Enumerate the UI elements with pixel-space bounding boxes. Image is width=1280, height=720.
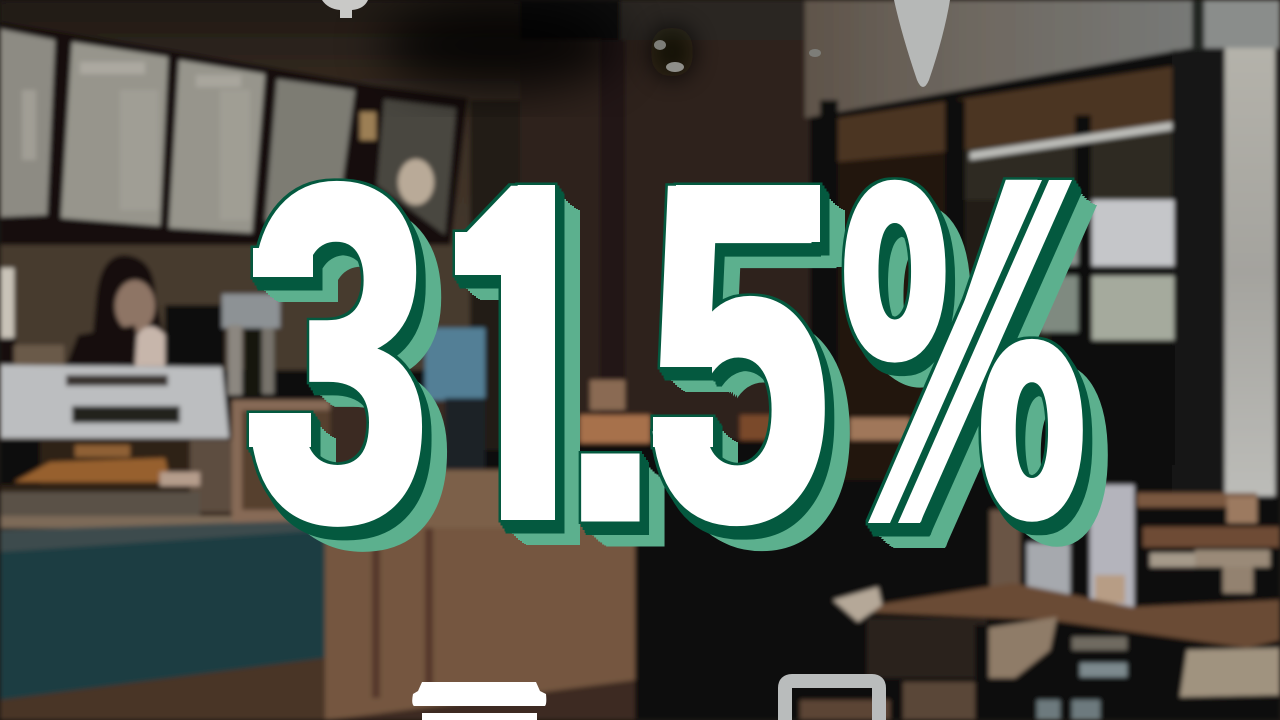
headline figure: 31.5%: 5 xyxy=(646,87,831,618)
headline figure: 31.5%: % xyxy=(838,101,1089,617)
headline figure: 31.5%: 1 xyxy=(441,87,605,618)
icon: tablet outline (cropped at bottom) xyxy=(778,674,886,720)
icon: takeaway coffee cup (cropped at bottom) xyxy=(412,682,546,720)
icon: grey pointer teardrop xyxy=(894,0,950,87)
headline figure: 31.5% xyxy=(246,177,1108,552)
headline figure: 31.5%: . xyxy=(561,159,660,601)
icon: map pin (cropped at top) xyxy=(322,0,368,18)
headline figure: 31.5%: 3 xyxy=(246,87,431,618)
